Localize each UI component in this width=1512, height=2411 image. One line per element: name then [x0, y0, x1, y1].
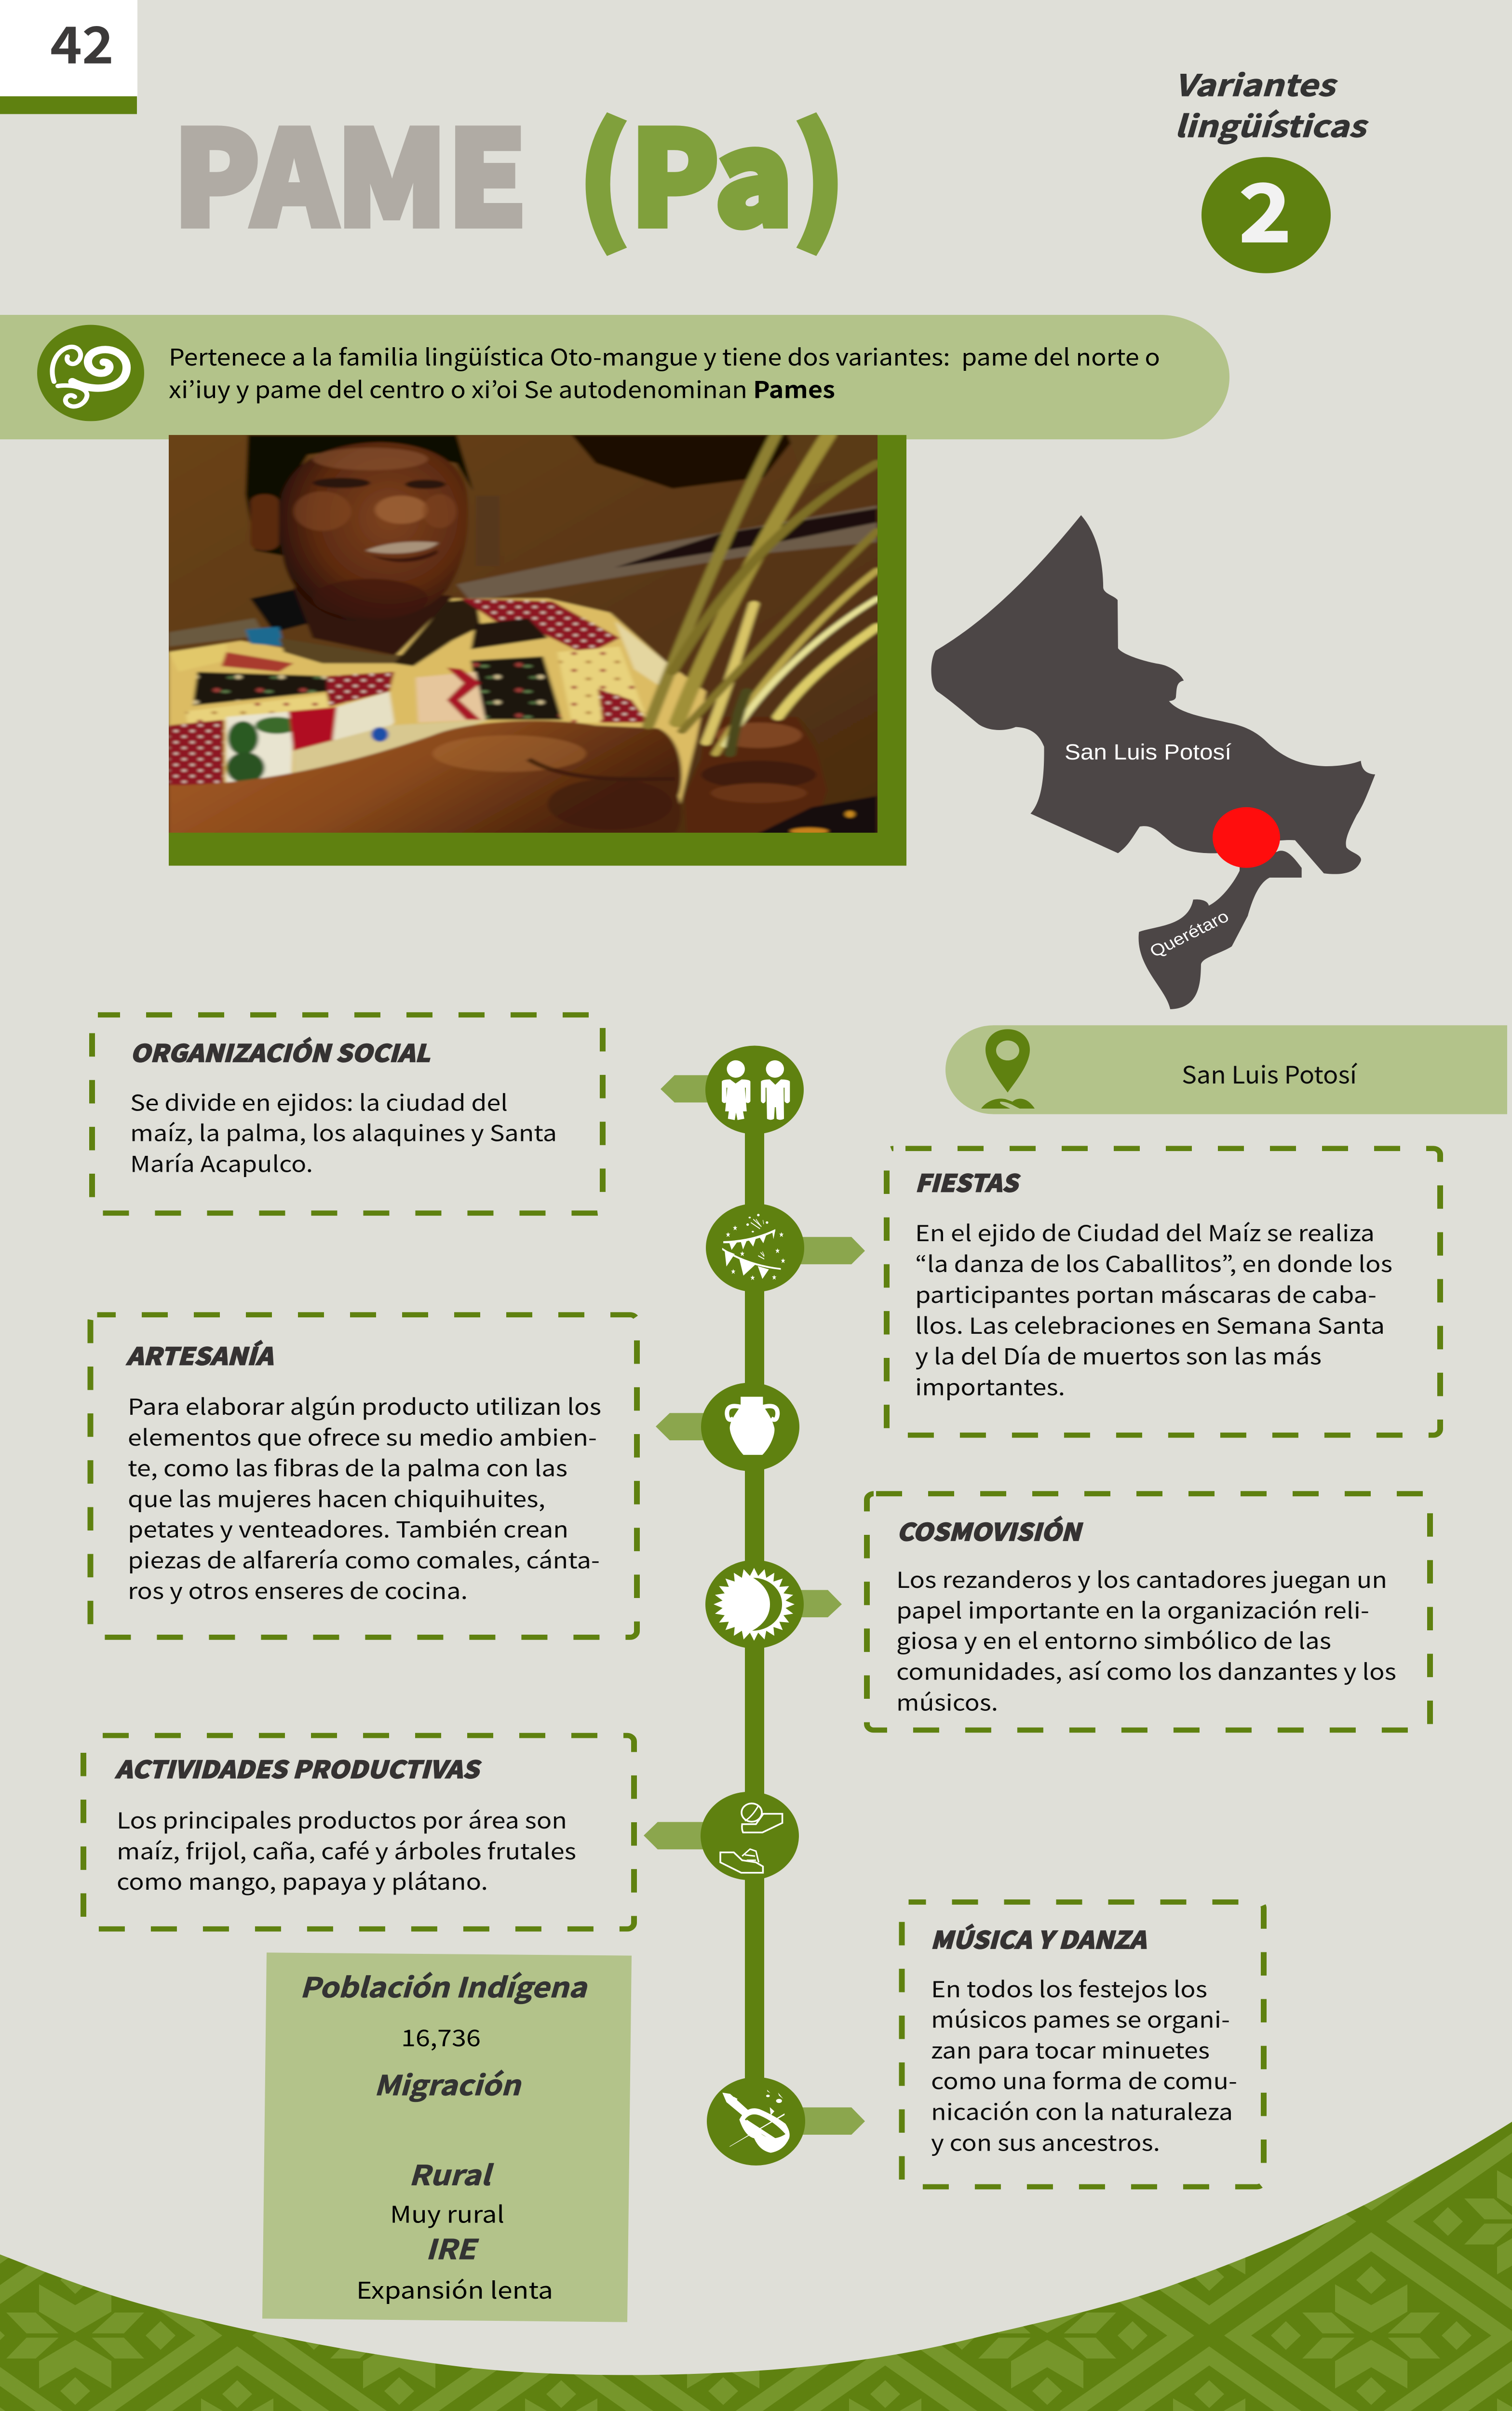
- panel: cosmovisión: [867, 1494, 1430, 1730]
- map: San Luis Potosí territory: [931, 515, 1375, 874]
- dashed border: [867, 1494, 1430, 1730]
- map: Querétaro territory: [1139, 851, 1302, 1009]
- arrow: fiestas: [791, 1237, 865, 1264]
- map label: San Luis Potosí: San Luis Potosí: [1065, 740, 1231, 764]
- heading: FIESTAS: [915, 1165, 1021, 1199]
- variantes label: [1174, 62, 1369, 146]
- body text: maíz, la palma, los alaquines y Santa: [130, 1115, 557, 1148]
- value: population: 16,736: [401, 2020, 481, 2053]
- title: abbreviation: (Pa): [578, 75, 845, 263]
- heading: ARTESANÍA: [126, 1338, 273, 1372]
- body text: En todos los festejos los: [931, 1972, 1207, 2004]
- page number: 42: [50, 5, 114, 79]
- body text: como mango, papaya y plátano.: [117, 1864, 488, 1896]
- panel: actividades productivas: [83, 1735, 634, 1929]
- body text: participantes portan máscaras de caba-: [915, 1277, 1377, 1309]
- heading: Rural: Rural: [409, 2154, 494, 2193]
- bottom woven pattern band: [0, 2122, 1512, 2411]
- dashed border: [92, 1015, 603, 1213]
- body text: maíz, frijol, caña, café y árboles frutales: [117, 1834, 576, 1866]
- arrow: música y danza: [791, 2107, 865, 2135]
- heading: Población Indígena: Población Indígena: [300, 1966, 588, 2005]
- body text: nicación con la naturaleza: [931, 2095, 1233, 2127]
- variantes lingüísticas block: [1174, 62, 1369, 273]
- timeline: [644, 1046, 865, 2166]
- arrow: organización social: [661, 1075, 723, 1102]
- body text: Se divide en ejidos: la ciudad del: [130, 1085, 508, 1117]
- heading: MÚSICA Y DANZA: [931, 1921, 1146, 1956]
- panel: artesanía: [91, 1315, 637, 1637]
- arrow: cosmovisión: [791, 1590, 842, 1617]
- dashed border: [83, 1735, 634, 1929]
- heading: Migración: Migración: [374, 2064, 522, 2103]
- dashed border: [91, 1315, 637, 1637]
- heading: ORGANIZACIÓN SOCIAL: [130, 1034, 430, 1069]
- dashed border: [887, 1149, 1440, 1435]
- intro text: Pertenece a la familia lingüística Oto-mangue y tiene dos variantes: pame del norte o: [169, 339, 1160, 372]
- heading: IRE: IRE: [426, 2228, 479, 2267]
- variantes count circle: 2: [1239, 150, 1291, 265]
- body text: comunidades, así como los danzantes y los: [896, 1654, 1396, 1686]
- icon: sun and moon: [705, 1560, 804, 1649]
- body text: zan para tocar minuetes: [931, 2033, 1210, 2065]
- map label: Querétaro: Querétaro: [1146, 907, 1232, 961]
- body text: Los principales productos por área son: [117, 1803, 567, 1835]
- location label: San Luis Potosí: [1182, 1056, 1358, 1091]
- panel: fiestas: [887, 1149, 1440, 1435]
- body text: [931, 1972, 1237, 2157]
- variantes count circle: [1202, 150, 1331, 273]
- arrow: artesanía: [656, 1413, 723, 1440]
- panel: population data: [262, 1952, 632, 2322]
- photo frame: [169, 435, 906, 866]
- panel: música y danza: [902, 1902, 1264, 2187]
- body text: [896, 1562, 1396, 1717]
- body text: [915, 1216, 1392, 1402]
- intro text: Pames: [753, 372, 835, 405]
- photo: woman weaving palm: [164, 429, 883, 838]
- body text: papel importante en la organización reli-: [896, 1593, 1369, 1625]
- body text: músicos.: [896, 1685, 998, 1717]
- icon: clay amphora: [701, 1382, 799, 1471]
- icon: festive bunting: [706, 1204, 804, 1292]
- intro text: xi’iuy y pame del centro o xi’oi Se autodenominan: [169, 372, 747, 405]
- body text: En el ejido de Ciudad del Maíz se realiza: [915, 1216, 1375, 1247]
- body text: y la del Día de muertos son las más: [915, 1339, 1322, 1371]
- variantes label: Variantes: [1174, 62, 1338, 105]
- body text: que las mujeres hacen chiquihuites,: [128, 1482, 545, 1514]
- body text: llos. Las celebraciones en Semana Santa: [915, 1308, 1385, 1340]
- arrow: actividades productivas: [644, 1822, 723, 1849]
- body text: María Acapulco.: [130, 1146, 313, 1178]
- body text: [117, 1803, 576, 1896]
- map: [931, 515, 1375, 1009]
- icon: hands with coffee bean and plant: [701, 1792, 799, 1880]
- location pill: [945, 1025, 1507, 1114]
- body text: [130, 1085, 557, 1178]
- value: rural: Muy rural: [390, 2196, 504, 2230]
- body text: [128, 1389, 601, 1605]
- body text: piezas de alfarería como comales, cánta-: [128, 1543, 600, 1575]
- icon: location pin: [981, 1029, 1035, 1109]
- body text: como una forma de comu-: [931, 2064, 1237, 2096]
- intro banner: [0, 315, 1229, 439]
- timeline spine: [745, 1090, 764, 2121]
- body text: giosa y en el entorno simbólico de las: [896, 1624, 1331, 1655]
- icon: people in traditional dress: [705, 1046, 804, 1134]
- body text: Para elaborar algún producto utilizan los: [128, 1389, 601, 1421]
- body text: importantes.: [915, 1370, 1065, 1402]
- icon: violin and music notes: [707, 2077, 805, 2166]
- body text: elementos que ofrece su medio ambien-: [128, 1420, 597, 1452]
- panel: organización social: [92, 1015, 603, 1213]
- title: [173, 75, 845, 263]
- intro text: [169, 339, 1160, 405]
- page number tab: [0, 0, 137, 114]
- body text: petates y venteadores. También crean: [128, 1512, 568, 1544]
- heading: ACTIVIDADES PRODUCTIVAS: [115, 1751, 482, 1786]
- value: IRE: Expansión lenta: [356, 2272, 553, 2305]
- body text: ros y otros enseres de cocina.: [128, 1573, 468, 1605]
- body text: te, como las fibras de la palma con las: [128, 1451, 567, 1483]
- body text: músicos pames se organi-: [931, 2002, 1230, 2034]
- body text: Los rezanderos y los cantadores juegan un: [896, 1562, 1387, 1594]
- heading: COSMOVISIÓN: [897, 1513, 1083, 1548]
- body text: y con sus ancestros.: [931, 2125, 1160, 2157]
- dashed border: [902, 1902, 1264, 2187]
- body text: “la danza de los Caballitos”, en donde los: [915, 1246, 1392, 1278]
- variantes label: lingüísticas: [1174, 103, 1369, 146]
- map: location marker: [1213, 807, 1280, 868]
- icon: swirl: [37, 325, 144, 421]
- title: language name: PAME: [173, 75, 527, 263]
